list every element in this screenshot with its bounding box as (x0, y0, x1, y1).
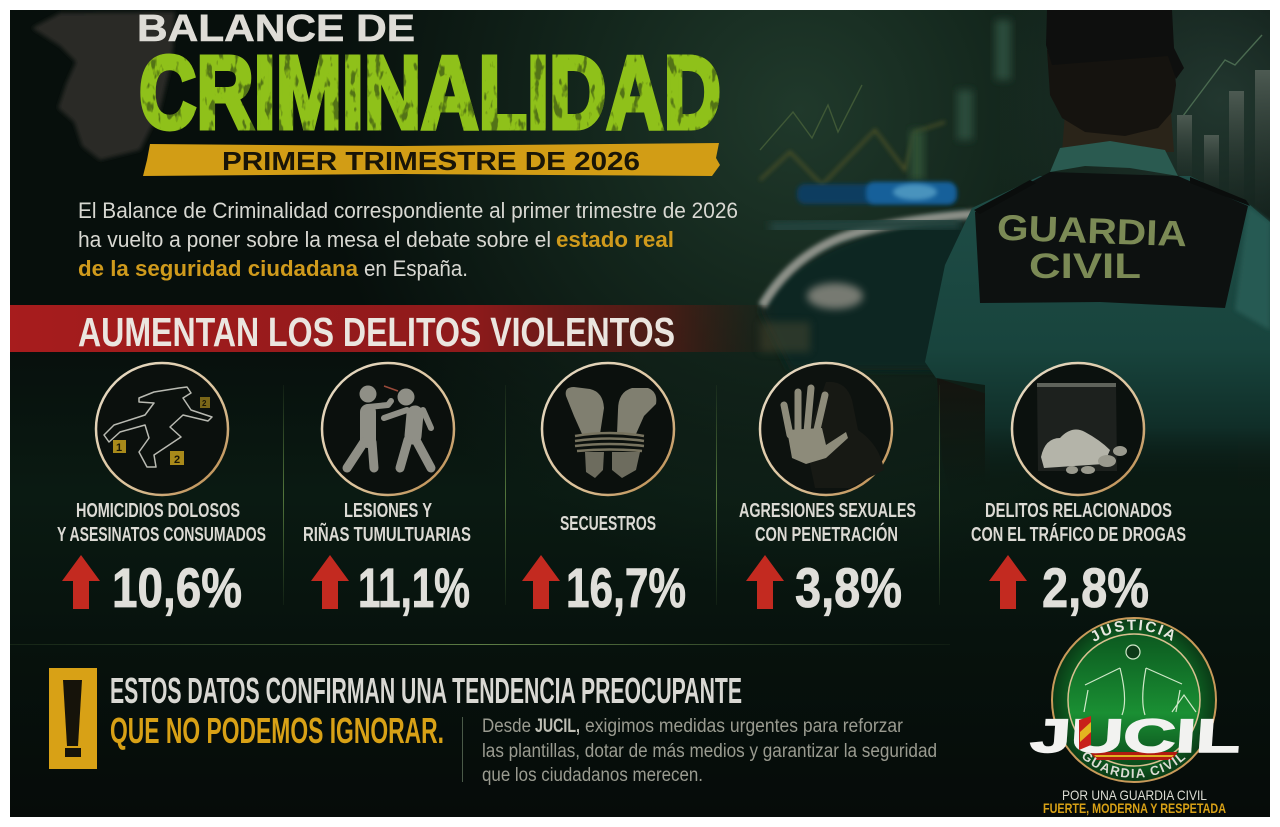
intro text: ha vuelto a poner sobre la mesa el debate sobre el (78, 227, 551, 252)
logo tagline (1043, 787, 1226, 816)
conclusion text: Desde (482, 716, 531, 737)
intro text (78, 198, 738, 281)
black yoke (975, 172, 1248, 308)
epaulettes (974, 177, 1250, 214)
arrow up (746, 555, 784, 609)
icon: bag of drugs (1012, 363, 1144, 495)
stat 3: 16,7% (566, 556, 686, 619)
logo tagline: POR UNA GUARDIA CIVIL (1062, 787, 1207, 803)
title: Criminalidad: CRIMINALIDAD (139, 35, 721, 150)
flag accent (1079, 716, 1091, 750)
conclusion heading (110, 670, 742, 751)
stat 4: 3,8% (795, 556, 902, 619)
conclusion text: JUCIL, (535, 716, 580, 737)
intro text: estado real (556, 227, 674, 252)
stat 4 (739, 500, 916, 619)
conclusion text: las plantillas, dotar de más medios y garantizar la seguridad (482, 741, 937, 762)
officer collar (1050, 141, 1178, 176)
conclusion heading: ESTOS DATOS CONFIRMAN UNA TENDENCIA PREOCUPANTE (110, 670, 742, 711)
stat 2: LESIONES Y (344, 500, 432, 522)
warning icon (49, 668, 97, 769)
logo tagline: FUERTE, MODERNA Y RESPETADA (1043, 800, 1226, 816)
stat 5: DELITOS RELACIONADOS (985, 500, 1172, 522)
conclusion text: exigimos medidas urgentes para reforzar (585, 716, 904, 737)
JUCIL wordmark: JUCIL (1029, 709, 1242, 762)
conclusion text: que los ciudadanos merecen. (482, 765, 703, 786)
flag stripe (1090, 752, 1178, 760)
conclusion heading: QUE NO PODEMOS IGNORAR. (110, 710, 444, 751)
stat 2: 11,1% (358, 556, 470, 619)
stat 1: 10,6% (112, 556, 242, 619)
title: Criminalidad: CRIMINALIDAD (139, 35, 721, 150)
stat 2 (303, 500, 471, 619)
subtitle banner (143, 143, 720, 176)
icon: stop hand (760, 363, 892, 495)
icon: crime scene outline: 2 (174, 454, 180, 466)
icon: two people fighting (322, 363, 454, 495)
arrow up (522, 555, 560, 609)
icon: crime scene outline: 2 (202, 399, 207, 408)
background growth charts (760, 20, 1270, 210)
stat 5 (971, 500, 1186, 619)
CIVIL lettering: CIVIL (1029, 247, 1141, 286)
stat 3: SECUESTROS (560, 513, 656, 535)
stat 3 (522, 513, 686, 619)
stat 1 (57, 500, 266, 619)
right sleeve highlight (1235, 206, 1270, 330)
stat 2: RIÑAS TUMULTUARIAS (303, 523, 471, 546)
title: Criminalidad (140, 54, 720, 132)
stat 4: AGRESIONES SEXUALES (739, 500, 916, 522)
icon: crime scene outline (96, 363, 228, 495)
justice figure (1084, 645, 1196, 715)
arrow up (62, 555, 100, 609)
title: Balance de: BALANCE DE (137, 8, 415, 50)
police car (760, 182, 975, 370)
column dividers (283, 385, 940, 605)
conclusion text (482, 716, 937, 786)
officer arms (937, 378, 979, 401)
stat 5: CON EL TRÁFICO DE DROGAS (971, 523, 1186, 546)
stat 1: HOMICIDIOS DOLOSOS (76, 500, 240, 522)
JUCIL logo (1030, 617, 1239, 783)
icon: tied hands (542, 363, 674, 495)
section band: violent crimes: AUMENTAN LOS DELITOS VIOLENTOS (78, 309, 675, 355)
stat 1: Y ASESINATOS CONSUMADOS (57, 524, 266, 546)
officer head and hair (1047, 50, 1176, 136)
intro text: en España. (364, 256, 468, 281)
arrow up (311, 555, 349, 609)
officer neck (1062, 114, 1174, 152)
officer cap (1046, 10, 1184, 79)
arc text: Guardia Civil: GUARDIA CIVIL (1082, 752, 1186, 778)
stat 5: 2,8% (1042, 556, 1149, 619)
officer shirt (925, 176, 1270, 454)
arrow up (989, 555, 1027, 609)
icon: crime scene outline: 1 (116, 442, 122, 454)
arc text: JUSTICIA: JUSTICIA (1092, 620, 1174, 642)
intro text: El Balance de Criminalidad correspondiente al primer trimestre de 2026 (78, 198, 738, 223)
stat 4: CON PENETRACIÓN (755, 522, 898, 546)
GUARDIA lettering: GUARDIA (996, 207, 1188, 254)
map of Spain silhouette (32, 12, 175, 160)
officer (925, 10, 1270, 454)
subtitle banner: PRIMER TRIMESTRE DE 2026 (222, 146, 640, 176)
intro text: de la seguridad ciudadana (78, 256, 359, 281)
